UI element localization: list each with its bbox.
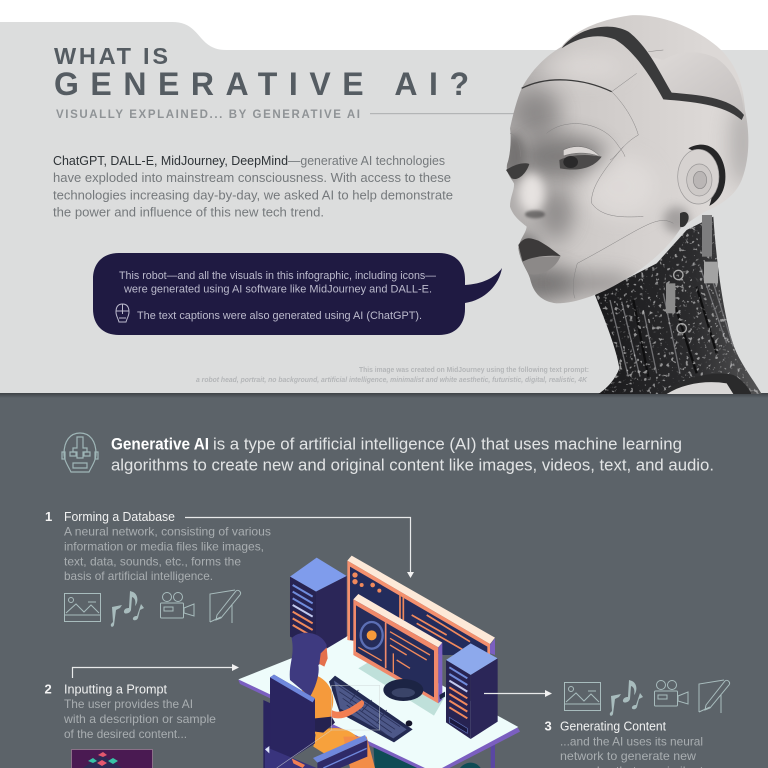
office chair [263,675,367,768]
robot head shell [507,15,748,303]
woman at desk [290,633,375,768]
step 1: forming a database: text, data, sounds, etc., forms the [64,554,241,568]
speech bubble callout: were generated using AI software like MidJourney and DALL-E. [123,284,432,296]
step 1: forming a database [45,509,271,583]
dark head band [562,27,744,120]
floor shadow [373,743,481,768]
large rear monitor [347,556,495,655]
intro paragraph: the power and influence of this new tech trend. [53,204,324,220]
right server tower [446,643,498,739]
icon: pen and paper [210,590,241,623]
title: WHAT IS [54,43,168,69]
step 2: inputting a prompt: of the desired content... [64,727,187,741]
icon: music notes [610,680,643,716]
step 3: generating content: network to generate new [560,749,696,763]
image credit caption: a robot head, portrait, no background, artificial intelligence, minimalist and white aesthetic, futuristic, digital, realistic, 4K [196,377,588,384]
icon: film camera [654,680,688,706]
step 1: forming a database: A neural network, consisting of various [64,524,271,538]
icon: robot face emblem [62,433,98,472]
left server tower [290,558,347,655]
intro paragraph: ChatGPT, DALL-E, MidJourney, DeepMind [53,153,288,168]
robot eyes [506,147,602,179]
computer workstation illustration [238,556,520,768]
arrow: prompt to desk [72,664,239,678]
step 3: generating content: 3 [544,718,552,734]
intro paragraph [53,153,453,220]
intro paragraph: have exploded into mainstream consciousness. With access to these [53,170,451,185]
icon: landscape image [564,682,600,710]
panel: light grey header background [0,22,768,394]
arrow: tower to generated content [484,690,552,697]
speech bubble callout [93,253,502,335]
intro paragraph: technologies increasing day-by-day, we asked AI to help demonstrate [53,188,453,202]
step 1: forming a database: basis of artificial intelligence. [64,569,213,583]
definition text: algorithms to create new and original content like images, videos, text, and audio. [111,456,714,474]
media icons: step 1 [64,590,241,627]
keyboard and mouse [329,676,413,742]
annotation lines [277,685,380,768]
face soft shading [502,53,757,298]
step 3: generating content: ...and the AI uses its neural [560,734,703,748]
definition text: is a type of artificial intelligence (AI) that uses machine learning [213,434,682,454]
face panel seams [510,50,673,298]
image credit caption [196,367,589,384]
step 1: forming a database: Forming a Database [64,510,175,524]
step 2: inputting a prompt: Inputting a Prompt [64,682,168,696]
robot ear disc [678,145,725,227]
definition text [111,434,714,474]
step 3: generating content [544,718,710,768]
speech bubble callout: The text captions were also generated using AI (ChatGPT). [137,310,422,322]
icon: film camera [160,592,194,618]
front monitor [353,594,442,703]
subtitle: VISUALLY EXPLAINED... BY GENERATIVE AI [56,109,360,121]
step 2: inputting a prompt: with a description or sample [63,712,216,726]
speech bubble callout: This robot—and all the visuals in this infographic, including icons— [119,270,436,282]
icon: small robot head [116,304,129,322]
icon: pen and paper [699,680,730,713]
robot neck and wiring [595,215,762,394]
step 2: inputting a prompt: 2 [44,682,52,696]
definition text: Generative AI [111,434,209,454]
monitor stand [383,679,445,701]
image credit caption: This image was created on MidJourney using the following text prompt: [359,367,589,374]
arrow: database to monitors [185,518,414,578]
step 1: forming a database: information or media files like images, [64,540,264,554]
prompt sample thumbnail [72,750,152,768]
icon: landscape image [64,594,100,622]
media icons: step 3 [564,680,730,716]
robot lips [518,238,561,275]
step 2: inputting a prompt: The user provides the AI [64,697,193,711]
icon: music notes [111,591,144,627]
step 3: generating content: Generating Content [560,720,667,734]
robot head illustration [502,15,762,394]
title [54,43,469,102]
intro paragraph: —generative AI technologies [288,153,445,168]
title: GENERATIVE AI? [54,66,469,102]
desk top [238,635,520,768]
step 2: inputting a prompt [44,682,216,741]
panel: dark explanation background [0,393,768,768]
desk legs [491,740,495,768]
back skull lobe [650,52,743,113]
step 1: forming a database: 1 [45,509,52,524]
